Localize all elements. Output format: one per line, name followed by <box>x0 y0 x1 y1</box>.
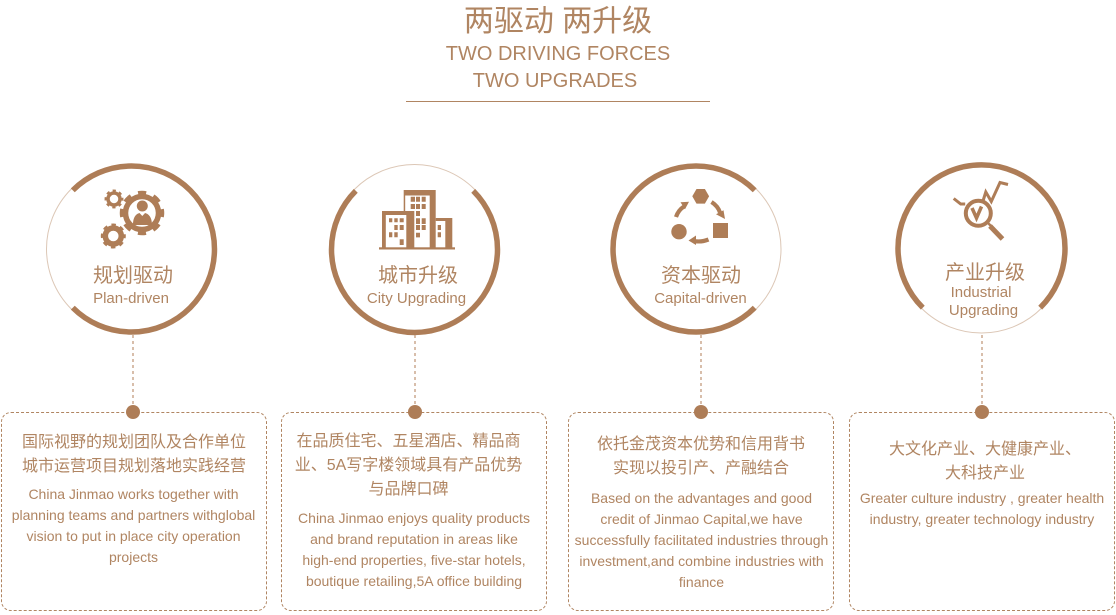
badge ring: plan-driven <box>46 164 216 334</box>
panel: detail box city upgrading <box>281 412 547 611</box>
text: plan-driven English: China Jinmao works together with <box>28 486 239 502</box>
subtitle line 1: TWO DRIVING FORCES <box>446 43 670 65</box>
text: capital English: finance <box>679 574 724 590</box>
text: industrial Chinese: 大科技产业 <box>945 465 1025 482</box>
panel: detail box industrial upgrading <box>849 412 1115 611</box>
text: city Chinese: 与品牌口碑 <box>368 481 449 498</box>
text: city English: boutique retailing,5A office building <box>306 573 522 589</box>
text: plan-driven Chinese: 国际视野的规划团队及合作单位 <box>22 434 246 451</box>
text: capital English <box>575 490 828 590</box>
text: plan-driven English: planning teams and partners withglobal <box>12 507 255 523</box>
text: plan-driven Chinese: 城市运营项目规划落地实践经营 <box>22 458 246 475</box>
label: City Upgrading: City Upgrading <box>367 290 466 307</box>
icon: buildings <box>379 190 455 250</box>
text: capital English: Based on the advantages and good <box>591 490 812 506</box>
text: capital English: credit of Jinmao Capital,we have <box>600 511 803 527</box>
panel: detail box capital-driven <box>568 412 834 611</box>
text: plan-driven Chinese <box>22 433 246 475</box>
text: industrial English <box>860 490 1104 527</box>
connector: city upgrading <box>408 335 422 419</box>
text: capital Chinese <box>597 435 805 477</box>
title: 两驱动 两升级 <box>464 5 652 38</box>
text: capital Chinese: 实现以投引产、产融结合 <box>613 460 789 477</box>
text: capital English: investment,and combine industries with <box>579 553 824 569</box>
text: capital English: successfully facilitated industries through <box>575 532 828 548</box>
text: city English: and brand reputation in areas like <box>310 531 518 547</box>
title rule <box>406 101 710 102</box>
text: industrial Chinese <box>889 440 1081 482</box>
icon: gears with person <box>102 191 162 247</box>
icon: magnifier over chart <box>954 182 1008 239</box>
label: Plan-driven: Plan-driven <box>93 290 169 307</box>
label: Industrial: Industrial <box>951 284 1011 301</box>
text: city Chinese <box>295 432 522 498</box>
text: industrial English: industry, greater technology industry <box>870 511 1094 527</box>
text: industrial Chinese: 大文化产业、大健康产业、 <box>889 441 1081 458</box>
label: 资本驱动: 资本驱动 <box>661 265 741 287</box>
connector: industrial upgrading <box>975 335 989 419</box>
text: city English <box>298 510 530 589</box>
text: capital Chinese: 依托金茂资本优势和信用背书 <box>597 436 805 453</box>
label: 规划驱动: 规划驱动 <box>93 265 173 287</box>
text: city English: China Jinmao enjoys quality products <box>298 510 530 526</box>
connector: plan-driven <box>126 335 140 419</box>
label: 产业升级: 产业升级 <box>945 262 1025 284</box>
text: plan-driven English: vision to put in place city operation <box>26 528 241 544</box>
panel: detail box plan-driven <box>1 412 267 611</box>
text: city English: high-end properties, five-star hotels, <box>302 552 526 568</box>
text: city Chinese: 在品质住宅、五星酒店、精品商 <box>296 433 521 450</box>
label: Capital-driven: Capital-driven <box>654 290 747 307</box>
badge ring: city upgrading <box>330 164 500 334</box>
label: 城市升级: 城市升级 <box>378 265 458 287</box>
subtitle line 2: TWO UPGRADES <box>473 70 637 92</box>
label: Upgrading: Upgrading <box>949 302 1018 319</box>
text: plan-driven English <box>12 486 255 565</box>
badge ring: capital-driven <box>611 164 781 334</box>
text: plan-driven English: projects <box>109 549 158 565</box>
icon: capital cycle <box>671 189 728 245</box>
connector: capital-driven <box>694 335 708 419</box>
text: industrial English: Greater culture industry , greater health <box>860 490 1104 506</box>
text: city Chinese: 业、5A写字楼领域具有产品优势 <box>295 457 522 474</box>
badge ring: industrial upgrading <box>896 163 1066 333</box>
